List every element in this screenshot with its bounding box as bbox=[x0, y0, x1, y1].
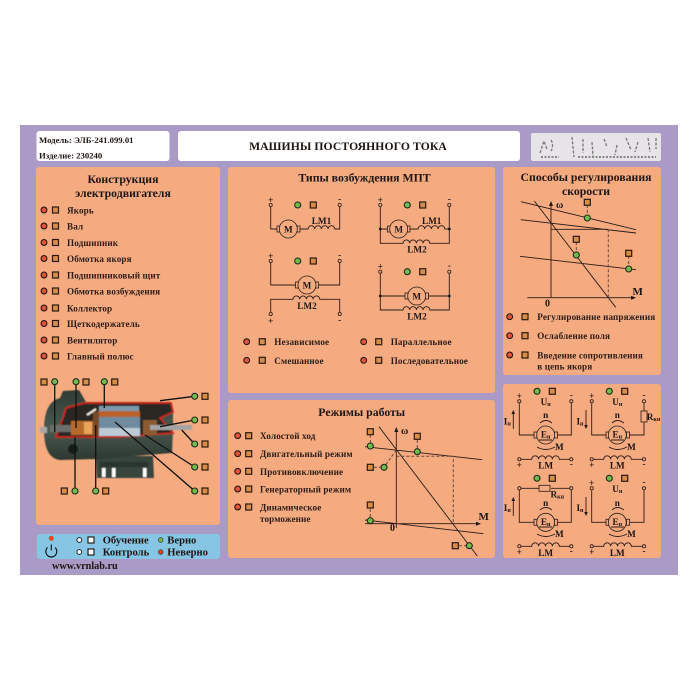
chart: operating modes: ω bbox=[401, 426, 408, 437]
circuit: series resistance bbox=[576, 388, 661, 470]
circuit: series resistance: E bbox=[612, 430, 619, 440]
circuit: independent: - bbox=[338, 194, 341, 204]
model info box: Изделие: 230240 bbox=[39, 150, 103, 160]
circuit: load resistance: н bbox=[507, 508, 511, 514]
mode switches bbox=[77, 536, 150, 558]
circuit: parallel with LM1: + bbox=[378, 195, 383, 205]
model info box bbox=[36, 131, 170, 161]
circuit: independent: + bbox=[268, 195, 273, 205]
parts list: Вал bbox=[67, 222, 83, 232]
excitation legend: Параллельное bbox=[391, 337, 452, 347]
speed control legend: Регулирование напряжения bbox=[537, 312, 655, 322]
circuit: series bbox=[268, 250, 341, 326]
chart: speed characteristics: ω bbox=[556, 200, 563, 211]
circuit: supply, current down: M bbox=[627, 529, 636, 539]
status legend: Неверно bbox=[167, 548, 208, 558]
panel: excitation types bbox=[228, 167, 495, 393]
circuit: supply, current down: U bbox=[612, 484, 619, 494]
modes legend: Двигательный режим bbox=[260, 449, 353, 459]
parts list: Подшипниковый щит bbox=[67, 270, 161, 280]
circuit: load resistance: M bbox=[555, 529, 564, 539]
circuit: parallel: - bbox=[448, 261, 451, 271]
circuit: series resistance: - bbox=[642, 390, 646, 400]
parts list bbox=[41, 206, 161, 362]
circuit: supply, current down: - bbox=[642, 546, 646, 556]
circuit: series: + bbox=[268, 251, 273, 261]
panel: motor construction bbox=[36, 167, 220, 525]
circuit: series resistance: I bbox=[576, 416, 580, 426]
circuit: supply, current up bbox=[504, 388, 573, 470]
circuit: supply, current down: н bbox=[619, 522, 623, 528]
parts list: Коллектор bbox=[67, 304, 112, 314]
circuit: load resistance: n bbox=[543, 498, 548, 508]
circuit: series resistance: - bbox=[642, 459, 646, 469]
circuit: supply, current down: н bbox=[619, 489, 623, 495]
circuit: series resistance: M bbox=[627, 442, 636, 452]
circuit: series: LM2 bbox=[297, 301, 317, 311]
circuit: independent: LM1 bbox=[312, 216, 332, 226]
circuit: load resistance: + bbox=[517, 547, 522, 557]
circuit: parallel with LM1: LM1 bbox=[422, 216, 442, 226]
circuit: load resistance: кн bbox=[557, 494, 565, 500]
modes legend: Холостой ход bbox=[260, 431, 316, 441]
parts list: Обмотка якоря bbox=[67, 254, 132, 264]
circuit: parallel bbox=[378, 261, 451, 322]
chart: speed characteristics: M bbox=[632, 286, 644, 298]
speed control legend: в цепь якоря bbox=[537, 362, 592, 372]
modes legend: торможение bbox=[260, 514, 311, 524]
model info box: Модель: ЭЛБ-241.099.01 bbox=[39, 135, 134, 145]
panel: controls legend bbox=[37, 534, 220, 559]
panel: circuit diagrams bbox=[503, 384, 661, 558]
chart: operating modes bbox=[365, 426, 490, 556]
chart: operating modes: 0 bbox=[390, 523, 395, 534]
circuit: series resistance: U bbox=[612, 397, 619, 407]
circuit: supply, current up: н bbox=[547, 402, 551, 408]
circuit: series resistance: н bbox=[580, 422, 584, 428]
heading: speed control: скорости bbox=[562, 184, 610, 198]
circuit: supply, current down: I bbox=[576, 503, 580, 513]
circuit: load resistance: E bbox=[541, 517, 547, 527]
modes legend bbox=[235, 431, 353, 524]
heading: construction: электродвигателя bbox=[75, 186, 171, 200]
parts list: Обмотка возбуждения bbox=[67, 286, 160, 296]
website: www.vrnlab.ru bbox=[52, 561, 118, 572]
modes legend: Противовключение bbox=[260, 467, 343, 477]
speed control legend: Ослабление поля bbox=[537, 331, 610, 341]
circuit: load resistance: н bbox=[547, 522, 551, 528]
motor markers bbox=[41, 379, 208, 494]
chart: operating modes: M bbox=[478, 511, 490, 523]
modes legend: Генераторный режим bbox=[260, 484, 351, 494]
excitation legend: Последовательное bbox=[391, 356, 468, 366]
circuit: series resistance: кн bbox=[653, 417, 661, 423]
excitation legend bbox=[244, 337, 468, 366]
circuit: supply, current down: - bbox=[642, 477, 646, 487]
status legend bbox=[158, 536, 208, 558]
circuit: supply, current up: I bbox=[504, 416, 507, 426]
circuit: supply, current down: н bbox=[580, 508, 584, 514]
heading: operating modes: Режимы работы bbox=[318, 405, 405, 419]
heading: speed control bbox=[520, 170, 652, 198]
speed control legend bbox=[507, 312, 655, 372]
stamp image bbox=[531, 133, 661, 161]
circuit: supply, current up: M bbox=[555, 442, 564, 452]
panel: operating modes bbox=[228, 400, 495, 558]
circuit: supply, current down: + bbox=[589, 547, 594, 557]
title: МАШИНЫ ПОСТОЯННОГО ТОКА bbox=[249, 140, 447, 153]
parts list: Щеткодержатель bbox=[67, 319, 140, 329]
excitation legend: Независимое bbox=[274, 337, 329, 347]
circuit: independent bbox=[268, 194, 341, 238]
circuit: supply, current up: - bbox=[570, 390, 573, 400]
speed control legend: Введение сопротивления bbox=[537, 350, 643, 360]
circuit: independent: M bbox=[284, 224, 293, 234]
panel: speed control bbox=[503, 167, 661, 375]
heading: speed control: Способы регулирования bbox=[520, 170, 652, 184]
circuit: series resistance: + bbox=[589, 391, 594, 401]
mode switches: Обучение bbox=[103, 536, 149, 546]
heading: construction bbox=[75, 172, 171, 200]
circuit: supply, current down: + bbox=[589, 478, 594, 488]
circuit: series resistance: n bbox=[615, 410, 620, 420]
circuit: load resistance: - bbox=[570, 546, 573, 556]
circuit: series: - bbox=[338, 315, 341, 325]
circuit: series resistance: + bbox=[589, 460, 594, 470]
circuit: supply, current up: - bbox=[570, 459, 573, 469]
circuit: parallel: M bbox=[412, 292, 421, 302]
circuit: series: M bbox=[303, 280, 312, 290]
heading: excitation types: Типы возбуждения МПТ bbox=[298, 170, 431, 184]
circuit: supply, current up: + bbox=[517, 460, 522, 470]
motor cutaway picture bbox=[40, 390, 192, 478]
circuit: parallel with LM1: LM2 bbox=[407, 244, 427, 254]
status legend: Верно bbox=[167, 536, 196, 546]
parts list: Якорь bbox=[67, 206, 94, 216]
circuit: supply, current up: n bbox=[543, 410, 548, 420]
circuit: parallel: LM2 bbox=[407, 312, 427, 322]
circuit: series resistance: н bbox=[619, 434, 623, 440]
circuit: series: - bbox=[338, 250, 341, 260]
circuit: parallel with LM1: M bbox=[394, 224, 403, 234]
parts list: Главный полюс bbox=[67, 352, 134, 362]
excitation legend: Смешанное bbox=[274, 356, 324, 366]
modes legend: Динамическое bbox=[260, 502, 321, 512]
circuit: load resistance: R bbox=[551, 490, 557, 500]
circuit: series: + bbox=[268, 316, 273, 326]
circuit: supply, current down: LM bbox=[610, 548, 625, 558]
chart: speed characteristics bbox=[520, 199, 644, 310]
motor leader lines bbox=[55, 382, 195, 491]
circuit: parallel with LM1: - bbox=[448, 194, 451, 204]
circuit: series resistance: LM bbox=[610, 460, 625, 470]
circuit: supply, current down: n bbox=[615, 498, 620, 508]
circuit: supply, current up: U bbox=[541, 397, 547, 407]
circuit: series resistance: н bbox=[619, 402, 623, 408]
circuit: load resistance bbox=[504, 475, 573, 558]
circuit: supply, current down bbox=[576, 475, 646, 558]
circuit: supply, current up: н bbox=[547, 434, 551, 440]
circuit: supply, current up: н bbox=[507, 422, 511, 428]
heading: construction: Конструкция bbox=[88, 172, 159, 186]
circuit: load resistance: I bbox=[504, 503, 507, 513]
circuit: supply, current up: E bbox=[541, 430, 547, 440]
title bbox=[178, 131, 520, 161]
parts list: Подшипник bbox=[67, 238, 119, 248]
circuit: supply, current down: E bbox=[612, 517, 619, 527]
main lilac board bbox=[20, 125, 678, 575]
circuit: series resistance: R bbox=[647, 412, 653, 422]
circuit: parallel with LM1 bbox=[378, 194, 451, 254]
circuit: supply, current up: LM bbox=[538, 460, 553, 470]
circuit: parallel: + bbox=[378, 262, 383, 272]
mode switches: Контроль bbox=[103, 548, 150, 558]
circuit: load resistance: LM bbox=[538, 548, 553, 558]
chart: speed characteristics: 0 bbox=[545, 298, 550, 310]
parts list: Вентилятор bbox=[67, 336, 117, 346]
icon: power button bbox=[46, 536, 57, 557]
circuit: supply, current up: + bbox=[517, 391, 522, 401]
